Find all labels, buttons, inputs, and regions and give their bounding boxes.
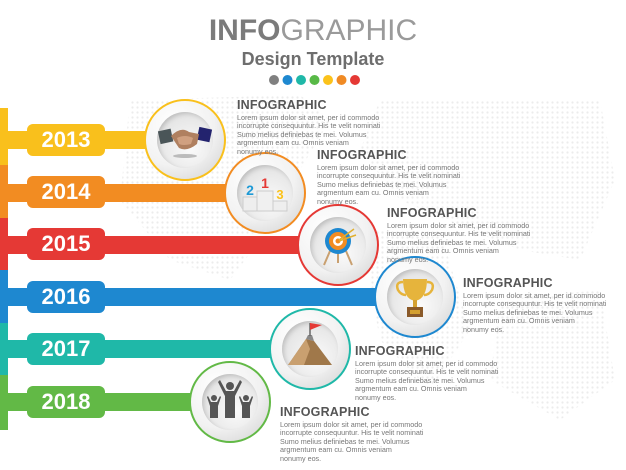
text 2013: INFOGRAPHIC [237, 98, 327, 112]
bars [0, 131, 160, 149]
text 2018: argmentum eam cu. Omnis veniam [280, 445, 392, 454]
circle 2016: trophy [374, 256, 456, 338]
year 2015: 2015 [42, 231, 90, 256]
title: INFOGRAPHIC [209, 14, 417, 47]
year 2016 [27, 281, 105, 313]
text 2018: Sumo melius definiebas te mei. Volumus [280, 437, 409, 446]
circle 2014: podium: 2 [246, 182, 254, 198]
circle 2014: podium: 3 [276, 187, 284, 202]
text 2017: Lorem ipsum dolor sit amet, per id commodo [355, 359, 497, 368]
text 2015: argmentum eam cu. Omnis veniam [387, 246, 499, 255]
circle 2014: podium: 1 [261, 175, 269, 191]
text 2018 [280, 405, 423, 463]
text 2016: Sumo melius definiebas te mei. Volumus [463, 308, 592, 317]
text 2015: incorrupte consequuntur. His te velit nominati [387, 229, 530, 238]
text 2015: nonumy eos. [387, 255, 428, 264]
text 2018: incorrupte consequuntur. His te velit nominati [280, 428, 423, 437]
text 2014: argmentum eam cu. Omnis veniam [317, 188, 429, 197]
text 2015 [387, 206, 530, 264]
text 2016: Lorem ipsum dolor sit amet, per id commodo [463, 291, 605, 300]
color dots [269, 75, 360, 85]
circle 2017: mountain flag [269, 308, 351, 390]
text 2016: nonumy eos. [463, 325, 504, 334]
year 2016: 2016 [42, 284, 90, 309]
year 2017 [27, 333, 105, 365]
text 2013: Lorem ipsum dolor sit amet, per id commodo [237, 113, 379, 122]
text 2014: Sumo melius definiebas te mei. Volumus [317, 180, 446, 189]
year 2013: 2013 [42, 127, 90, 152]
text 2017: INFOGRAPHIC [355, 344, 445, 358]
text 2017: argmentum eam cu. Omnis veniam [355, 384, 467, 393]
text 2015: Lorem ipsum dolor sit amet, per id commodo [387, 221, 529, 230]
year 2018: 2018 [42, 389, 90, 414]
text 2014 [317, 148, 460, 206]
text 2017: Sumo melius definiebas te mei. Volumus [355, 376, 484, 385]
year 2014 [27, 176, 105, 208]
year 2017: 2017 [42, 336, 90, 361]
left vertical strip [0, 108, 8, 430]
text 2016: INFOGRAPHIC [463, 276, 553, 290]
text 2015: Sumo melius definiebas te mei. Volumus [387, 238, 516, 247]
text 2017: nonumy eos. [355, 393, 396, 402]
text 2013: incorrupte consequuntur. His te velit nominati [237, 121, 380, 130]
text 2018: nonumy eos. [280, 454, 321, 463]
text 2014: nonumy eos. [317, 197, 358, 206]
circle 2018: people [189, 361, 271, 443]
text 2018: Lorem ipsum dolor sit amet, per id commodo [280, 420, 422, 429]
text 2013: Sumo melius definiebas te mei. Volumus [237, 130, 366, 139]
circle 2014: podium [224, 152, 306, 234]
text 2016: argmentum eam cu. Omnis veniam [463, 316, 575, 325]
text 2014: Lorem ipsum dolor sit amet, per id commodo [317, 163, 459, 172]
text 2016 [463, 276, 606, 334]
text 2016: incorrupte consequuntur. His te velit nominati [463, 299, 606, 308]
year 2018 [27, 386, 105, 418]
text 2013: argmentum eam cu. Omnis veniam [237, 138, 349, 147]
text 2013 [237, 98, 380, 156]
text 2017: incorrupte consequuntur. His te velit nominati [355, 367, 498, 376]
text 2013: nonumy eos. [237, 147, 278, 156]
subtitle: Design Template [242, 49, 384, 69]
year 2013 [27, 124, 105, 156]
year 2014: 2014 [42, 179, 90, 204]
text 2014: incorrupte consequuntur. His te velit nominati [317, 171, 460, 180]
circle 2013: handshake [144, 99, 226, 181]
text 2018: INFOGRAPHIC [280, 405, 370, 419]
circle 2015: target [297, 204, 379, 286]
text 2017 [355, 344, 498, 402]
text 2014: INFOGRAPHIC [317, 148, 407, 162]
year 2015 [27, 228, 105, 260]
text 2015: INFOGRAPHIC [387, 206, 477, 220]
